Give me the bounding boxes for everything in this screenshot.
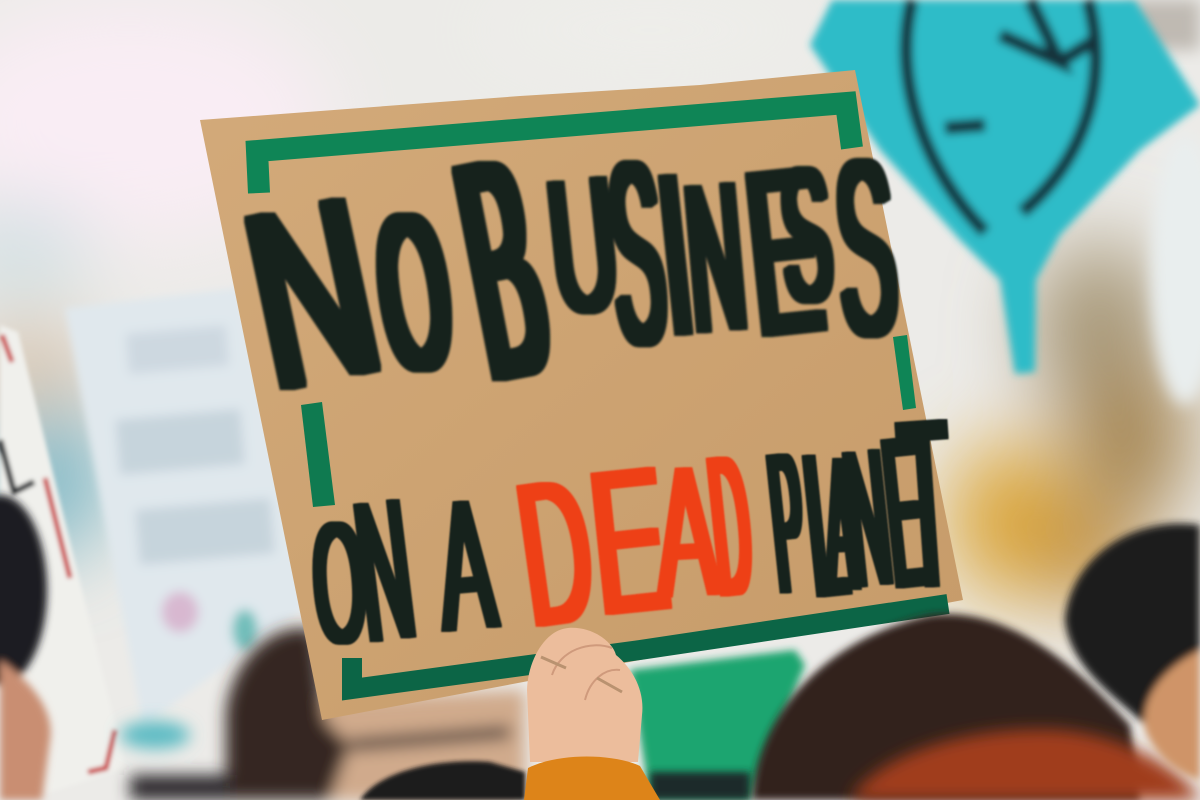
slogan: PLANET: A (822, 418, 859, 631)
slogan: NO: O (364, 167, 464, 419)
slogan: DEAD in red (506, 412, 760, 670)
slogan: USINESS (540, 106, 904, 400)
placard blurred writing (115, 325, 275, 650)
slogan: DEAD in red: A (651, 426, 722, 636)
slogan: ON A (307, 456, 502, 684)
slogan: ON A: N (346, 456, 423, 684)
slogan: USINESS: N (679, 139, 753, 377)
slogan: USINESS: E (736, 117, 833, 386)
slogan: USINESS: S (775, 128, 838, 343)
slogan: DEAD in red: E (581, 423, 678, 658)
rings (541, 657, 622, 692)
slogan: PLANET: L (796, 410, 856, 641)
slogan: PLANET: E (875, 392, 936, 634)
flag emblem (906, 0, 1096, 232)
slogan: DEAD in red: D (701, 412, 760, 638)
slogan: ON A: A (431, 461, 502, 671)
hand holding the placard (527, 628, 642, 762)
dark garment under jacket (650, 772, 750, 800)
red-orange hair foreground (850, 729, 1200, 800)
slogan: USINESS: S (600, 106, 675, 400)
slogan: USINESS: S (828, 106, 904, 389)
person head bottom centre (360, 761, 525, 800)
slogan: PLANET: T (893, 368, 960, 639)
right person (1065, 524, 1200, 780)
person behind sign (120, 628, 525, 800)
background placard (65, 288, 305, 726)
slogan: PLANET (761, 368, 960, 641)
slogan: PLANET: N (837, 408, 899, 629)
left white sign (0, 325, 126, 794)
slogan: USINESS: U (540, 136, 627, 355)
teal flag (810, 0, 1200, 374)
cardboard placard (200, 70, 963, 720)
slogan: NO: B (437, 91, 569, 445)
slogan: USINESS: I (648, 124, 703, 384)
left foreground person (0, 495, 51, 800)
orange sleeve (524, 756, 660, 800)
slogan: DEAD in red: D (506, 433, 606, 670)
slogan: NO: N (227, 146, 398, 442)
slogan: ON A: O (307, 485, 372, 681)
green jacket (630, 650, 805, 800)
slogan: PLANET: P (761, 410, 814, 636)
green painted border (257, 103, 948, 689)
slogan: NO (227, 91, 569, 445)
dark hair bottom right (752, 614, 1140, 800)
